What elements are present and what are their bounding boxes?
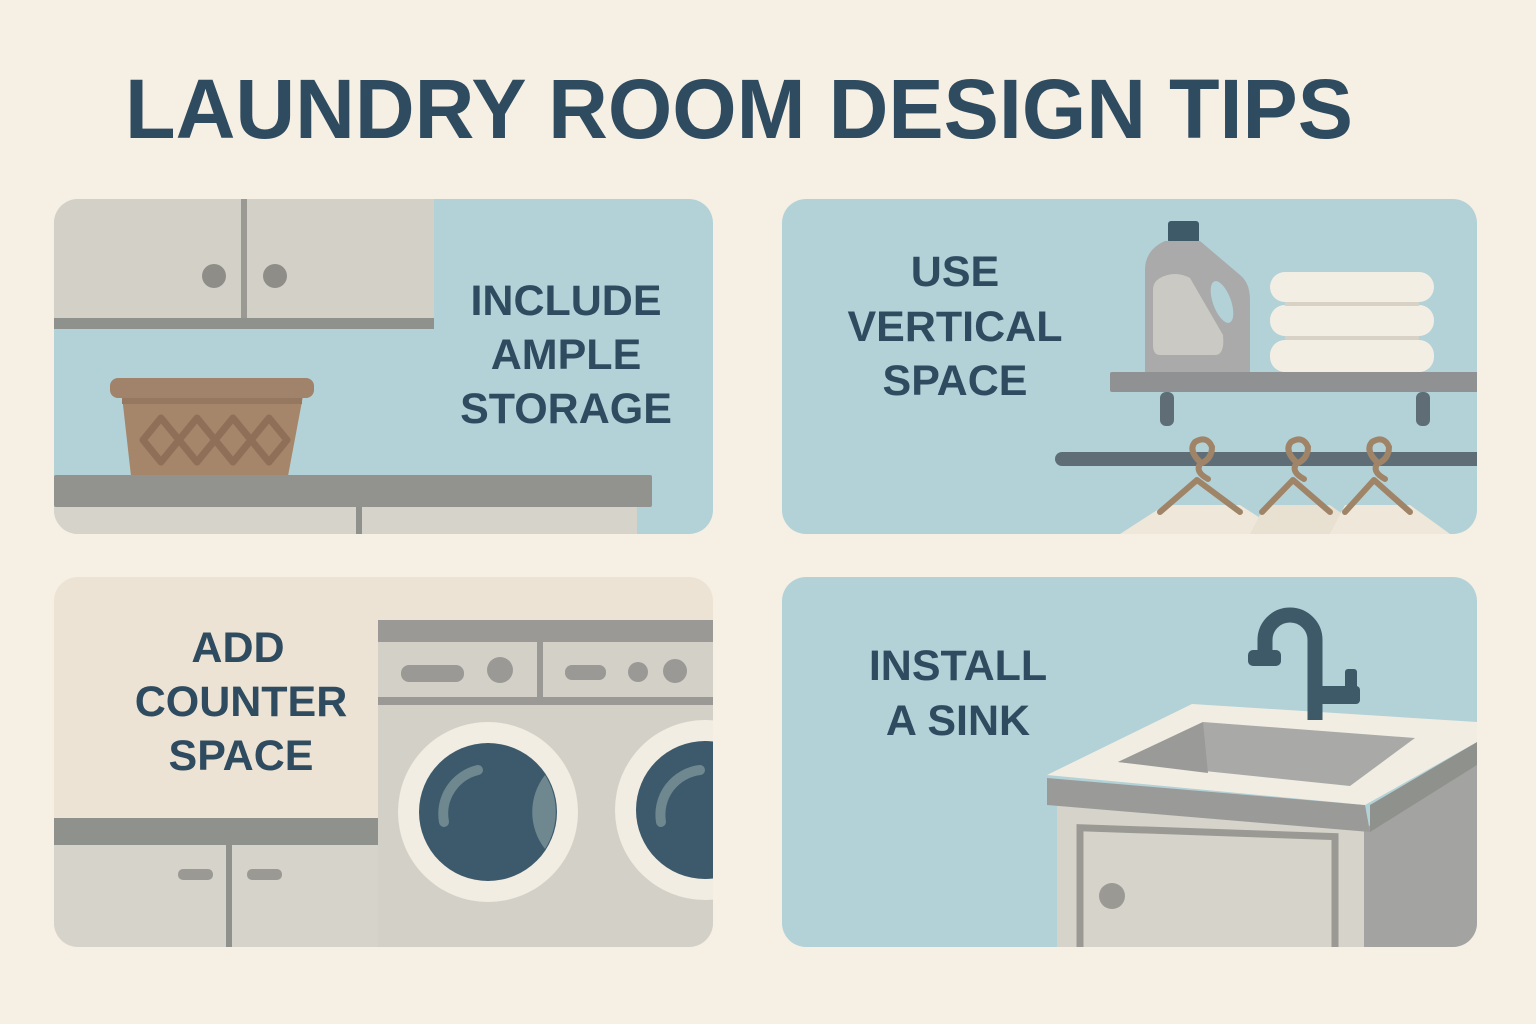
icon: sink cabinet [1047, 615, 1477, 967]
heading: install a sink [872, 650, 1046, 736]
heading: include ample storage: INCLUDE [470, 277, 662, 325]
heading: install a sink: INSTALL [869, 642, 1047, 690]
icon: folded towels [1270, 272, 1434, 372]
title: LAUNDRY ROOM DESIGN TIPS [125, 62, 1353, 156]
panel: include ample storage [54, 199, 713, 537]
heading: use vertical space: SPACE [883, 357, 1027, 405]
heading: add counter space: ADD [191, 624, 285, 672]
heading: include ample storage: AMPLE [491, 331, 641, 379]
hanging rod with garments [1055, 439, 1485, 534]
lower cabinets [54, 818, 380, 950]
heading: use vertical space: USE [911, 248, 999, 296]
heading: add counter space: SPACE [169, 732, 313, 780]
panel: install a sink [782, 577, 1477, 967]
icon: detergent jug [1145, 221, 1250, 372]
heading: use vertical space [848, 256, 1062, 396]
heading: use vertical space: VERTICAL [848, 303, 1062, 351]
heading: add counter space: COUNTER [135, 678, 347, 726]
heading: include ample storage [461, 285, 670, 424]
upper cabinets [54, 199, 434, 329]
heading: add counter space [136, 632, 346, 770]
counter [54, 475, 652, 537]
heading: install a sink: A SINK [886, 697, 1030, 745]
icon: washer and dryer [378, 620, 713, 947]
icon: basket [110, 378, 314, 476]
panel: use vertical space [782, 199, 1485, 534]
panel: add counter space [54, 577, 713, 947]
heading: include ample storage: STORAGE [460, 385, 672, 433]
shelf [1110, 372, 1480, 426]
